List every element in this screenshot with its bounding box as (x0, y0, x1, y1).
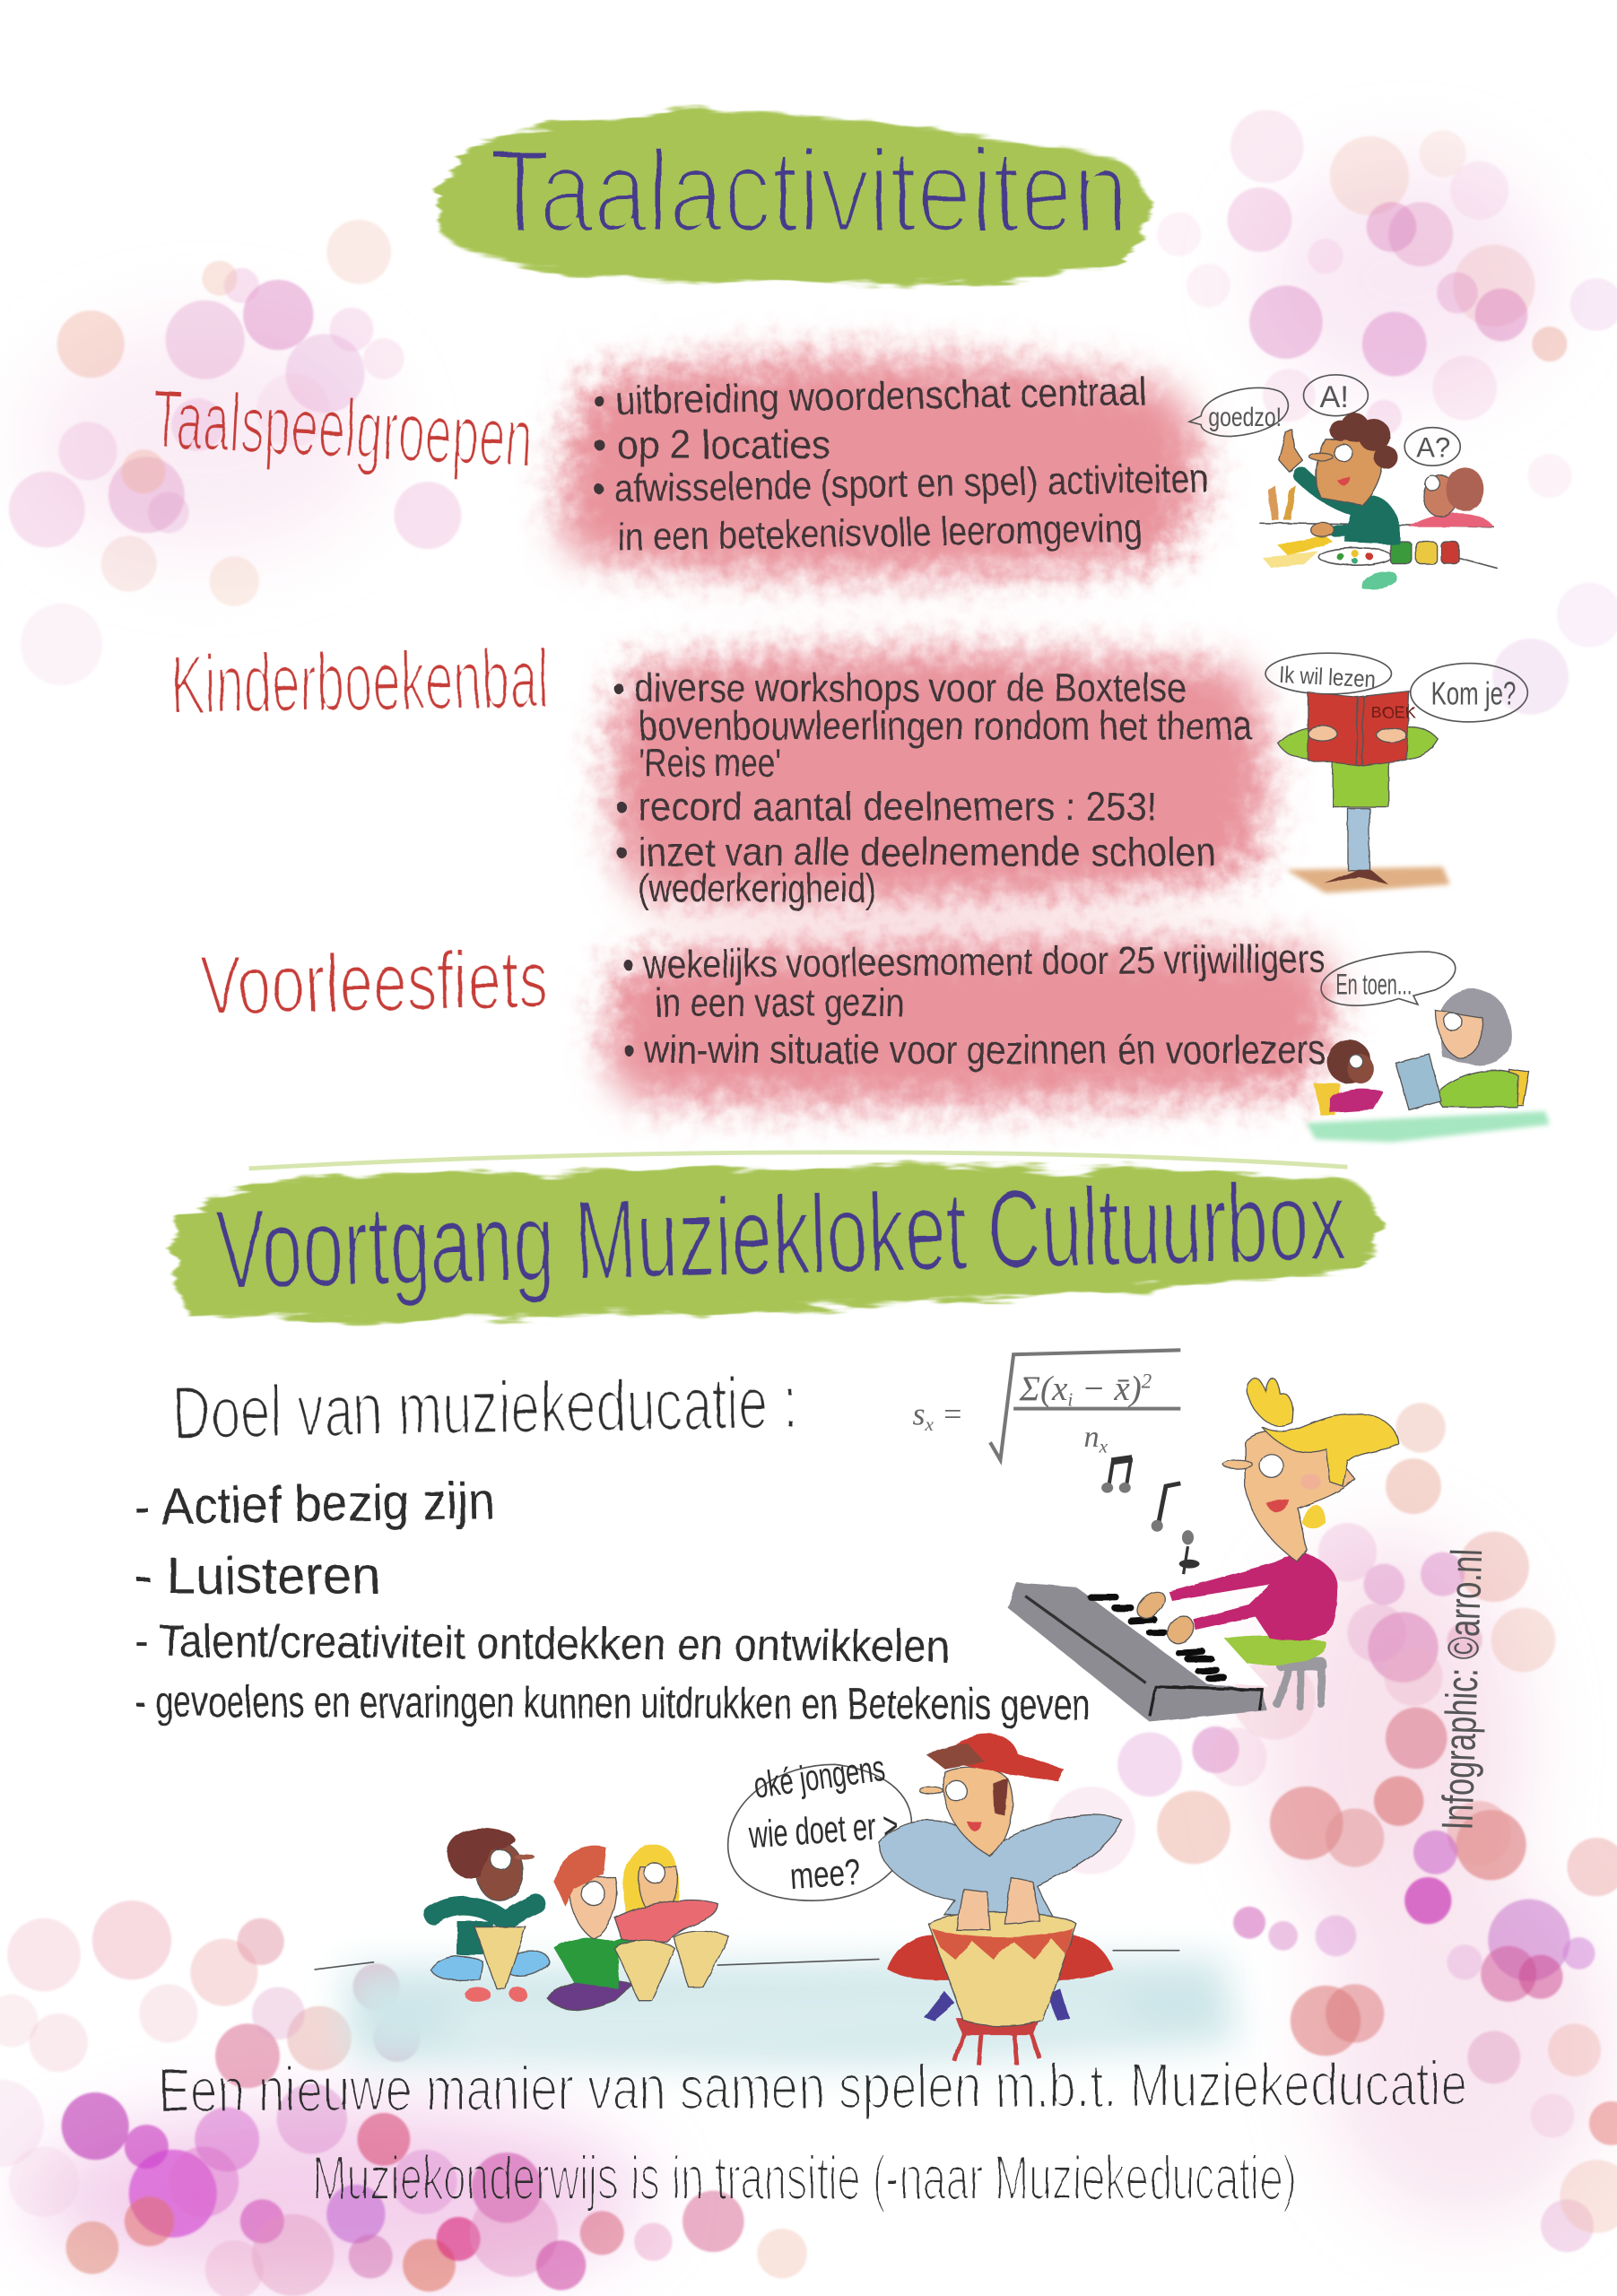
formula: standard deviation: = (934, 1396, 963, 1432)
kid 3 (615, 1844, 717, 1942)
green trousers (1208, 1635, 1327, 1665)
bullet list: 'Reis mee' (639, 741, 780, 785)
figure: BOEK (1371, 703, 1416, 721)
formula: standard deviation: x (924, 1413, 934, 1435)
figure (1279, 691, 1439, 884)
kid 1 (430, 1828, 549, 2002)
bullet list: • record aantal deelnemers : 253! (615, 785, 1157, 829)
bullet list: • diverse workshops voor de Boxtelse (613, 666, 1187, 710)
volunteer (1395, 989, 1529, 1110)
green ground (1307, 1111, 1550, 1142)
speech bubble: Kom je? (1411, 664, 1527, 722)
speech bubble: A? (1404, 428, 1460, 465)
section: Kinderboekenbal (170, 633, 1268, 911)
formula: standard deviation: 2 (1142, 1370, 1152, 1393)
title banner: Taalactiviteiten (437, 112, 1149, 284)
bubbles: lower right (1048, 1403, 1617, 2252)
floor: blue-green wash (344, 1959, 1238, 2065)
hands (1133, 1587, 1199, 1648)
stool (955, 2021, 1040, 2065)
illustration: three kids drumming (430, 1828, 729, 2010)
list: doelen: - Actief bezig zijn (134, 1473, 495, 1536)
bubbles: top right (1157, 109, 1617, 715)
illustration: reading volunteer and child (1307, 952, 1550, 1142)
title text: Taalactiviteiten (491, 126, 1128, 257)
formula: standard deviation (912, 1350, 1180, 1460)
table items (1260, 486, 1497, 589)
credit: Infographic: ©arro.nl (1433, 1548, 1491, 1831)
bullet list (593, 370, 1208, 560)
list: doelen: - Talent/creativiteit ontdekken en ontwikkelen (135, 1615, 950, 1672)
glasses and nose (1223, 1454, 1321, 1512)
bullet list: bovenbouwleerlingen rondom het thema (639, 704, 1253, 748)
keyboard (1008, 1583, 1268, 1722)
bullet list: • op 2 locaties (593, 423, 830, 467)
bullet list (613, 666, 1253, 911)
speech bubble: A! (1304, 375, 1368, 416)
icon: music notes (1101, 1458, 1200, 1574)
speech bubble: En toen (1321, 952, 1456, 1005)
formula: standard deviation: x (1099, 1436, 1108, 1457)
bullet list: • afwisselende (sport en spel) activiteiten (593, 457, 1208, 511)
speech bubble: goedzo (1189, 387, 1288, 437)
child (1409, 467, 1494, 527)
section label: Voorleesfiets (199, 934, 550, 1031)
yellow hair (1247, 1378, 1399, 1528)
section: Voorleesfiets (199, 934, 1332, 1105)
speech bubble: Kom je?: Kom je? (1431, 674, 1516, 711)
list: doelen (134, 1473, 1090, 1729)
bullet list: in een betekenisvolle leeromgeving (618, 507, 1143, 560)
kid 2 (546, 1847, 662, 2010)
bullet list: • wekelijks voorleesmoment door 25 vrijwilligers (622, 937, 1326, 987)
face and neck (1245, 1431, 1355, 1561)
closing text (158, 2049, 1467, 2213)
speech bubble: Ik wil lezen: Ik wil lezen (1278, 661, 1377, 692)
bullet list: • uitbreiding woordenschat centraal (593, 370, 1147, 423)
formula: standard deviation: n (1084, 1420, 1100, 1454)
section label: Taalspeelgroepen (150, 373, 535, 484)
illustration: keyboard player (1008, 1378, 1399, 1722)
formula: standard deviation: i (1067, 1388, 1073, 1410)
list: doelen: - Luisteren (135, 1547, 381, 1605)
speech bubble: A?: A? (1416, 431, 1450, 463)
blue shoes (925, 1988, 1069, 2021)
bullet list: (wederkerigheid) (639, 867, 876, 911)
section: Taalspeelgroepen (150, 357, 1208, 577)
speech bubble: oké jongens: mee? (788, 1851, 862, 1897)
red trousers (888, 1935, 1113, 1979)
illustration: child reading red book (1265, 653, 1527, 893)
speech bubble: oké jongens: wie doet er > (747, 1804, 900, 1856)
section label: Kinderboekenbal (170, 633, 550, 731)
blue shirt and arms (879, 1814, 1122, 1916)
bubbles: bottom left (0, 1900, 807, 2296)
pink brush background (611, 650, 1268, 903)
drum (928, 1912, 1076, 2026)
formula: standard deviation: − x̄) (1073, 1370, 1142, 1408)
bullet list: in een vast gezin (655, 981, 904, 1025)
ground (1286, 867, 1450, 893)
child listener (1314, 1039, 1384, 1116)
speech bubble: En toen: En toen... (1335, 968, 1412, 1001)
head (943, 1767, 1013, 1857)
speech bubble: goedzo: goedzo! (1208, 403, 1282, 432)
stool (1275, 1657, 1327, 1708)
speech bubble: oké jongens (728, 1747, 911, 1900)
title banner: Voortgang Muziekloket Cultuurbox (172, 1152, 1379, 1320)
small drums (615, 1931, 729, 2000)
bullet list: • win-win situatie voor gezinnen én voorlezers (622, 1028, 1326, 1072)
pink sweater and arms (1169, 1551, 1337, 1640)
heading: Doel van muziekeducatie: Doel van muziekeducatie : (171, 1361, 798, 1454)
teacher (1279, 413, 1401, 544)
green brush shape (437, 112, 1149, 284)
green brush shape (172, 1167, 1379, 1320)
hands (956, 1877, 1040, 1930)
illustration: drummer with cap (879, 1734, 1122, 2065)
red cap and hair (926, 1734, 1064, 1815)
pink brush background (606, 939, 1332, 1105)
pink brush background (561, 357, 1201, 577)
speech bubble: oké jongens: oké jongens (752, 1747, 888, 1806)
bullet list: • inzet van alle deelnemende scholen (615, 831, 1216, 874)
list: doelen: - gevoelens en ervaringen kunnen uitdrukken en Betekenis geven (135, 1677, 1090, 1729)
speech bubble: A!: A! (1319, 380, 1349, 414)
formula: standard deviation: s (912, 1396, 925, 1432)
thin brush line (249, 1152, 1347, 1169)
formula: standard deviation: Σ(x (1020, 1370, 1067, 1408)
glasses (920, 1780, 981, 1831)
illustration: teacher and child painting (1189, 375, 1497, 589)
bubbles: upper left (9, 220, 461, 685)
bullet list (622, 937, 1326, 1072)
